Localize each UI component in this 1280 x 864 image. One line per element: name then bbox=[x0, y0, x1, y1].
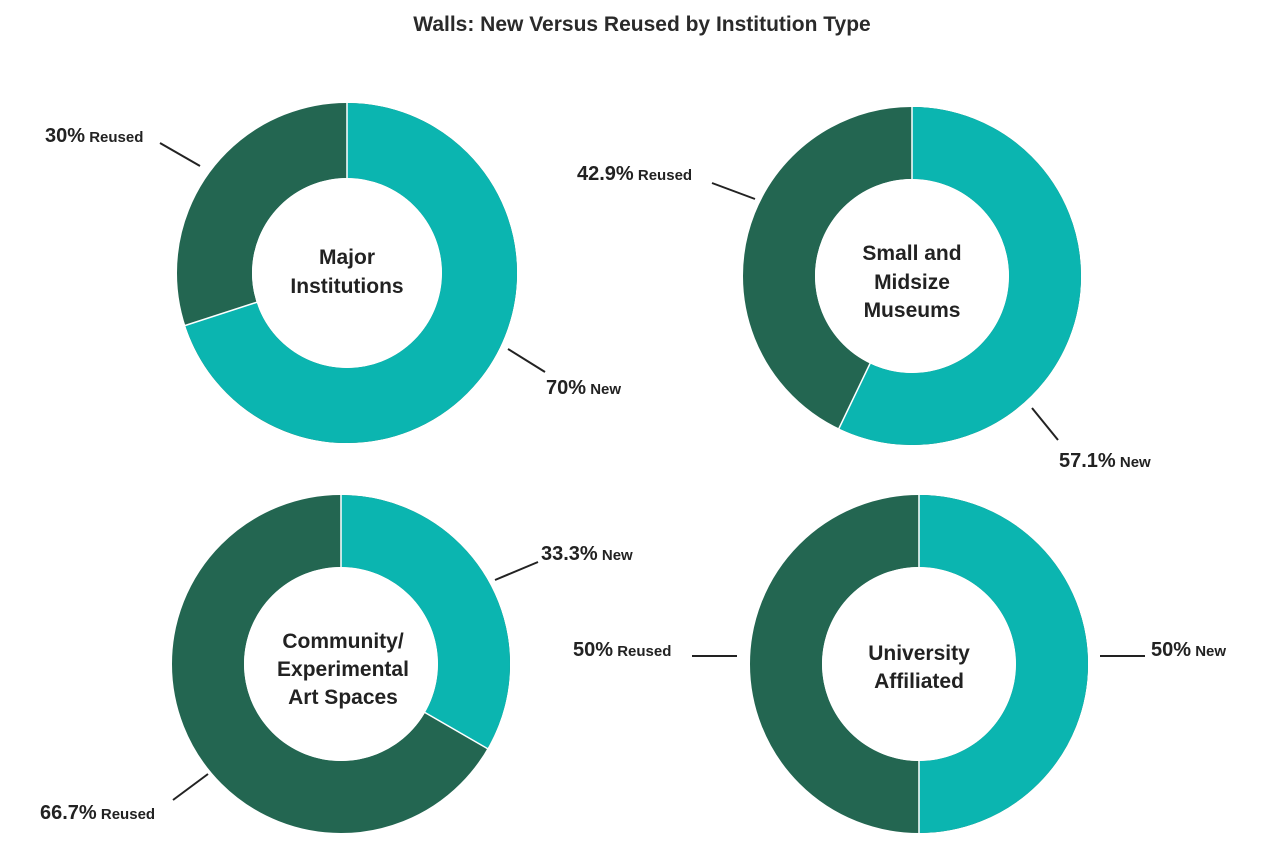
label: 66.7% reused: 66.7% Reused bbox=[40, 802, 155, 824]
label: 30% reused bbox=[45, 125, 200, 166]
label: 57.1% new bbox=[1032, 408, 1151, 472]
panel: small and midsize museums donut: Museums bbox=[864, 299, 960, 322]
panel: community/experimental art spaces donut: Experimental bbox=[277, 658, 409, 681]
label: 42.9% reused bbox=[577, 163, 755, 199]
label: 66.7% reused bbox=[40, 774, 208, 824]
panel: major institutions donut: Institutions bbox=[290, 275, 404, 298]
label: 50% new: 50% New bbox=[1151, 639, 1226, 661]
panel: community/experimental art spaces donut bbox=[208, 493, 489, 797]
label: 50% reused: 50% Reused bbox=[573, 639, 671, 661]
label: 70% new bbox=[508, 349, 621, 399]
panel: small and midsize museums donut: Midsize bbox=[874, 271, 950, 294]
label: 33.3% new: 33.3% New bbox=[541, 543, 633, 565]
panel: university affiliated donut: University bbox=[868, 642, 970, 665]
panel: university affiliated donut: Affiliated bbox=[874, 670, 964, 693]
panel: community/experimental art spaces donut: Art Spaces bbox=[288, 686, 398, 709]
label: 70% new: 70% New bbox=[546, 377, 621, 399]
panel: major institutions donut: Major bbox=[319, 246, 375, 269]
panel: university affiliated donut bbox=[786, 493, 1052, 835]
label: 50% new bbox=[1100, 639, 1226, 661]
label: 42.9% reused: 42.9% Reused bbox=[577, 163, 692, 185]
label: 30% reused: 30% Reused bbox=[45, 125, 143, 147]
label: 33.3% new bbox=[495, 543, 633, 580]
label: 57.1% new: 57.1% New bbox=[1059, 450, 1151, 472]
panel: community/experimental art spaces donut: Community/ bbox=[282, 630, 404, 653]
panel: small and midsize museums donut bbox=[779, 105, 1045, 431]
panel: major institutions donut bbox=[184, 100, 480, 406]
title: Walls: New Versus Reused by Institution Type bbox=[413, 13, 871, 36]
panel: small and midsize museums donut: Small and bbox=[862, 242, 962, 265]
